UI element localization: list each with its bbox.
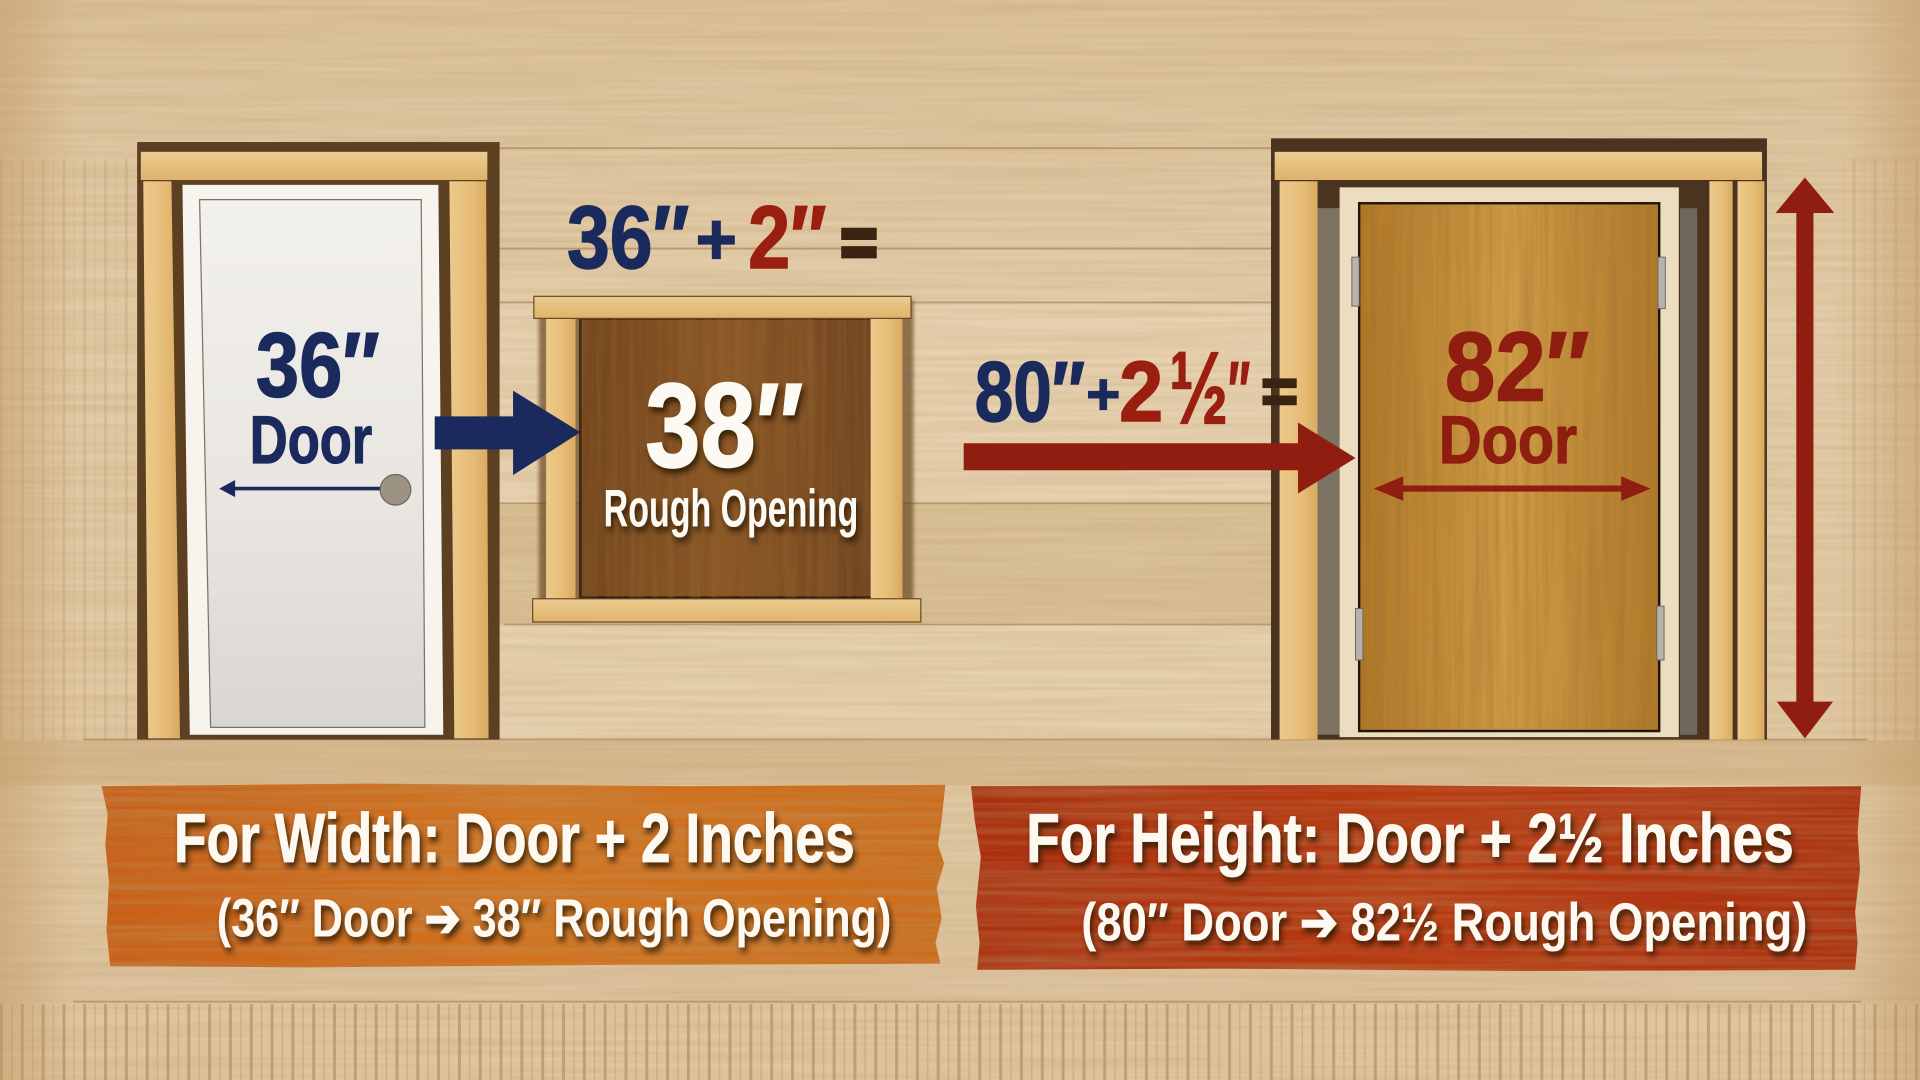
- door knob: [380, 474, 411, 505]
- equation: 80 + 2 1/2 =: +: [1086, 362, 1120, 427]
- right frame header: [1275, 152, 1762, 180]
- left door recess shadow: [137, 142, 500, 740]
- frame shadow: [539, 300, 913, 616]
- left door assembly: [137, 142, 500, 740]
- double-headed width arrow: [1374, 476, 1651, 501]
- equation: 80 + 2 1/2 =: 2: [1119, 344, 1163, 440]
- vertical height arrow: [1776, 178, 1834, 738]
- equation: 80 + 2 1/2 =: ½: [1169, 331, 1228, 446]
- door size label: 36 inch: 36″: [256, 315, 380, 417]
- brown opening panel: [580, 318, 874, 598]
- width rule heading: For Width: Door + 2 Inches: [174, 799, 855, 877]
- equation: 80 + 2 1/2 =: [975, 331, 1297, 446]
- equation: 80 + 2 1/2 =: ″: [1228, 344, 1250, 440]
- opening sill: [533, 599, 921, 622]
- door hinges: [1352, 257, 1665, 660]
- right door recess shadow: [1271, 138, 1767, 740]
- rough opening size: 38 inch: 38″: [645, 359, 803, 493]
- left frame jambs: [143, 181, 489, 738]
- door label: Door: [250, 403, 372, 478]
- door size label: 82 inch: 82″: [1445, 311, 1589, 421]
- left frame header: [141, 152, 487, 180]
- equation: 36 + 2 =: +: [696, 197, 737, 280]
- grey gap insulation: [1318, 208, 1697, 735]
- banner: width rule: [98, 781, 949, 971]
- equation: 80 + 2 1/2 =: 80″: [975, 344, 1085, 440]
- white door leaf: [200, 200, 425, 727]
- red arrow into door: [964, 422, 1356, 493]
- white door casing: [182, 185, 443, 735]
- rough opening frame: [533, 296, 921, 622]
- height rule example: (80″ Door ➔ 82½ Rough Opening): [1081, 892, 1807, 952]
- banner: height rule: [967, 781, 1867, 975]
- door casing: [1340, 187, 1679, 737]
- wood door leaf: [1359, 203, 1659, 731]
- width arrow: [219, 480, 382, 497]
- navy arrow to rough opening: [435, 391, 580, 475]
- width rule example: (36″ Door ➔ 38″ Rough Opening): [217, 889, 891, 949]
- equation: 36 + 2 =: 36″: [567, 187, 689, 287]
- equation: 36 + 2 =: [567, 187, 877, 287]
- right frame jambs: [1280, 181, 1764, 740]
- red banner shape: [971, 785, 1861, 971]
- rough opening label: Rough Opening: [604, 480, 858, 539]
- right door assembly: [1271, 138, 1834, 740]
- door label: Door: [1439, 403, 1577, 478]
- opening header: [534, 296, 911, 318]
- orange banner shape: [102, 784, 945, 967]
- equation: 36 + 2 =: 2″: [748, 187, 827, 287]
- opening studs: [546, 317, 902, 599]
